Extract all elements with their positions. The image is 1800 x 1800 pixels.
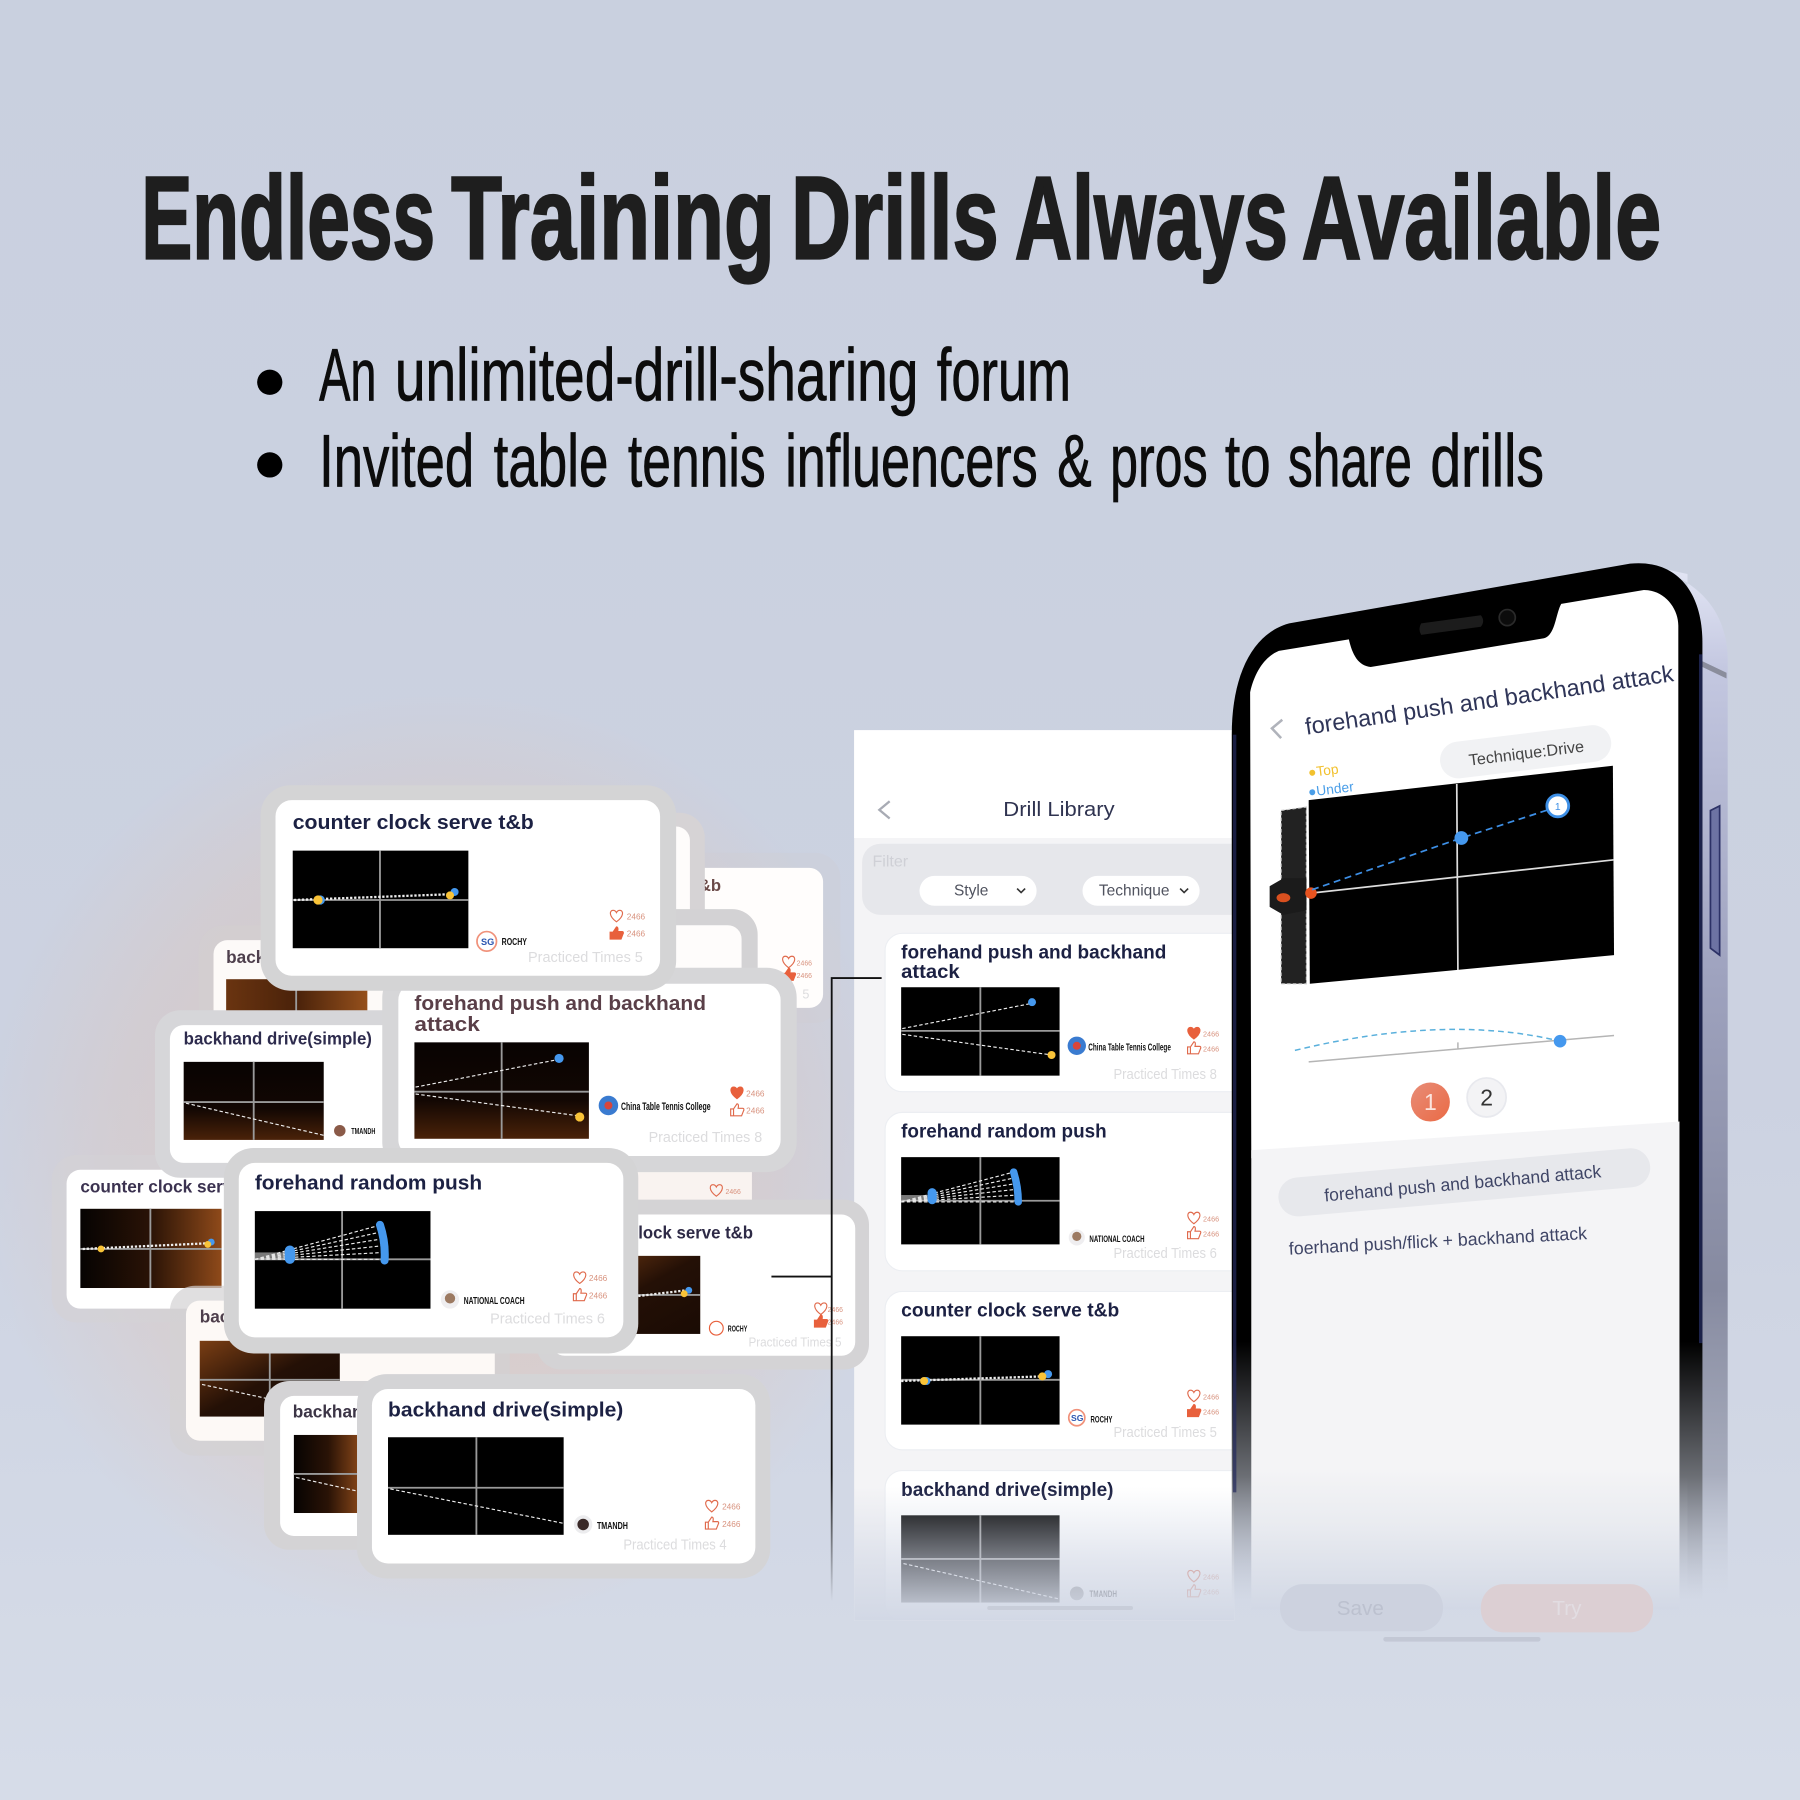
robot barrel (1277, 893, 1290, 902)
card: backhand (back) (170, 1286, 510, 1456)
bullet text 2: & (1057, 419, 1092, 503)
card: counter clock serve front: Practiced Times 5 (528, 949, 643, 966)
step 1 (1411, 1083, 1450, 1122)
drill name pill (1277, 1147, 1652, 1218)
robot track (1281, 807, 1306, 984)
card: backhand drive simple front: 2466 (722, 1520, 741, 1529)
list card 3: SG (1071, 1413, 1084, 1423)
card: counter clock serve front: ROCHY (502, 937, 527, 948)
bullet text 1: An (319, 333, 377, 417)
list card 1: 2466 (1203, 1030, 1219, 1039)
technique pill (1438, 723, 1613, 780)
step 2 (1467, 1078, 1506, 1117)
legend (1307, 761, 1355, 800)
list card 1: Practiced Times 8 (1114, 1066, 1217, 1083)
list card 3: Practiced Times 5 (1114, 1424, 1217, 1441)
save button (1280, 1584, 1443, 1631)
card: background t&b: 5 (802, 988, 809, 1002)
list card 4: 2466 (1203, 1588, 1219, 1597)
card: forehand random push front: 2466 (589, 1291, 608, 1300)
card: forehand push and backhand attack: China Table Tennis College (621, 1101, 711, 1113)
card: backhand drive simple (mid) (155, 1010, 488, 1178)
card: forehand push and backhand attack: 2466 (746, 1107, 765, 1116)
title: Endless (141, 152, 435, 284)
card: backhand drive simple front: 2466 (722, 1503, 741, 1512)
list card 2: 2466 (1203, 1229, 1219, 1238)
phone screen (1250, 590, 1678, 1158)
step 2: 2 (1480, 1084, 1493, 1110)
library header (854, 730, 1234, 838)
robot nozzle (1305, 887, 1317, 899)
phone mockup (1232, 563, 1728, 1642)
card: backhand drive simple (mid): backhand drive(simple) (184, 1029, 372, 1049)
card: counter clock serve front (261, 785, 676, 991)
card: back (199, 925, 526, 1097)
landing marker: 1 (1555, 802, 1561, 813)
library home bar (987, 1606, 1133, 1610)
list card 4: 2466 (1203, 1573, 1219, 1582)
library bottom fade (854, 1487, 1234, 1621)
bullet text 2: drills (1430, 419, 1544, 503)
legend: ●Under (1307, 779, 1355, 800)
list card 4: backhand drive(simple) (901, 1480, 1114, 1501)
try button (1481, 1584, 1653, 1632)
bullet text 2: influencers (785, 419, 1038, 503)
list card 3: 2466 (1203, 1392, 1219, 1401)
bullet text 2: Invited (319, 419, 474, 503)
card: forehand push and backhand attack: Practiced Times 8 (649, 1129, 762, 1146)
card: backhand drive simple (mid): TMANDH (351, 1126, 375, 1136)
card: forehand random push front: Practiced Times 6 (490, 1311, 605, 1328)
card: forehand random push front: NATIONAL COACH (464, 1296, 525, 1307)
phone side frame (1639, 564, 1728, 1598)
panel: drill library screen (854, 730, 1252, 1621)
card: counter clock serve (right): ROCHY (728, 1325, 748, 1334)
list card 3: 2466 (1203, 1407, 1219, 1416)
bullet text 2: share (1288, 419, 1412, 503)
card: backhand drive simple front (357, 1374, 770, 1578)
card: counter clock serve (right): 2466 (828, 1320, 843, 1327)
list card 3: counter clock serve t&b (901, 1301, 1119, 1322)
bullet text 2: to (1225, 419, 1271, 503)
card: backhand drive simple front: TMANDH (597, 1521, 628, 1532)
card: backhand (back lower) (264, 1381, 597, 1550)
bullet text 2 (319, 419, 1544, 503)
list card 2 (885, 1112, 1252, 1271)
card: forehand random push front: forehand random push (255, 1172, 482, 1194)
try button: Try (1552, 1597, 1582, 1620)
library background (854, 730, 1234, 1621)
card: counter clock serve (back) (52, 1155, 385, 1322)
bullet 1 (257, 370, 282, 395)
card: forehand random push front (224, 1148, 638, 1353)
bullet 2 (257, 452, 282, 478)
filter panel: Filter (872, 853, 909, 871)
card: counter clock serve front: 2466 (627, 930, 646, 939)
back chevron (879, 801, 890, 818)
list card 4: TMANDH (1089, 1589, 1117, 1599)
technique pill: Technique:Drive (1468, 738, 1585, 770)
drill title: forehand push and backhand attack (1303, 660, 1675, 740)
landing marker (1547, 795, 1569, 817)
filter panel: Technique (1099, 882, 1169, 899)
save button: Save (1337, 1597, 1384, 1620)
bullet list (257, 333, 1544, 503)
drill name pill: forehand push and backhand attack (1323, 1161, 1602, 1205)
list card 1: 2466 (1203, 1045, 1219, 1054)
drill description: foerhand push/flick + backhand attack (1288, 1223, 1588, 1259)
orange glow behind cards (0, 689, 901, 1630)
phone bezel (1232, 563, 1702, 1601)
list card 4 (886, 1472, 1232, 1602)
antenna band (1702, 661, 1727, 678)
card: forehand push and backhand attack: forehand push and backhand (414, 993, 706, 1015)
step 1: 1 (1424, 1089, 1437, 1115)
list card 2: 2466 (1203, 1214, 1219, 1223)
card: counter clock serve (back): counter clock serve t&b (80, 1177, 276, 1197)
card: counter clock serve (right): 2466 (828, 1307, 843, 1314)
title: Training (451, 152, 775, 284)
ball path (1312, 809, 1550, 890)
bullet text 2: tennis (628, 419, 766, 503)
card: backhand drive simple front: backhand drive(simple) (388, 1400, 623, 1422)
connector lines (771, 978, 882, 1601)
title (141, 152, 1661, 284)
phone home bar (1383, 1637, 1541, 1642)
card: forehand push and backhand attack: attack (414, 1014, 481, 1036)
title: Drills (791, 152, 999, 284)
robot head (1270, 878, 1306, 915)
screen lower panel (1251, 1122, 1679, 1609)
card: counter clock serve (right): lock serve t&b (638, 1223, 753, 1243)
card: background strip: 2466 (726, 1189, 741, 1196)
legend: ●Top (1307, 761, 1340, 780)
card: counter clock serve front: SG (481, 937, 494, 947)
bullet text 1: forum (937, 333, 1071, 417)
card: forehand push and backhand attack: 2466 (746, 1089, 765, 1098)
list card 2: forehand random push (901, 1122, 1107, 1143)
card: background t&b: 2466 (797, 973, 812, 980)
ball (1454, 831, 1468, 845)
table net lines (1311, 784, 1614, 970)
list card 1: China Table Tennis College (1088, 1042, 1171, 1053)
side view (1295, 1029, 1614, 1062)
card: background t&b: t&b (693, 876, 721, 895)
library heading: Drill Library (1003, 798, 1115, 821)
card: back: backhand (226, 947, 306, 967)
list card 2: Practiced Times 6 (1114, 1245, 1217, 1262)
bullet text 1: unlimited-drill-sharing (395, 333, 918, 417)
card: background t&b (517, 853, 840, 1023)
filter panel: Style (954, 882, 988, 899)
card: background stack upper (482, 813, 705, 953)
card: forehand push and backhand attack (382, 968, 797, 1172)
bullet text 2: table (494, 419, 608, 503)
card: counter clock serve front: 2466 (627, 913, 646, 922)
filter panel (862, 844, 1252, 915)
list card 2: NATIONAL COACH (1089, 1234, 1145, 1244)
camera (1499, 610, 1515, 626)
card: background strip (574, 1125, 752, 1217)
list card 3 (885, 1291, 1252, 1450)
phone left edge highlight (1233, 735, 1236, 1492)
card: counter clock serve (right) (536, 1200, 869, 1370)
bullet text 2: pros (1110, 419, 1208, 503)
card: background t&b: 2466 (797, 960, 812, 967)
table (1309, 766, 1614, 984)
list card 1 (885, 933, 1252, 1092)
speaker (1419, 615, 1483, 635)
phone right edge highlight (1699, 654, 1702, 1343)
list card 1: forehand push and backhand (901, 943, 1166, 964)
card: backhand (back lower): backhand drive (293, 1402, 419, 1422)
card: background stack middle (494, 909, 758, 1012)
list card 3: ROCHY (1091, 1414, 1112, 1424)
side button (1710, 806, 1720, 955)
card: counter clock serve (right): Practiced Times 5 (748, 1336, 841, 1350)
title: Always (1015, 152, 1288, 284)
list card 1: attack (901, 962, 960, 983)
card: backhand (back): backhand (200, 1306, 280, 1326)
card: counter clock serve front: counter clock serve t&b (293, 812, 534, 834)
card: forehand random push front: 2466 (589, 1274, 608, 1283)
card: backhand drive simple front: Practiced Times 4 (623, 1537, 727, 1554)
back chevron (1272, 720, 1282, 738)
